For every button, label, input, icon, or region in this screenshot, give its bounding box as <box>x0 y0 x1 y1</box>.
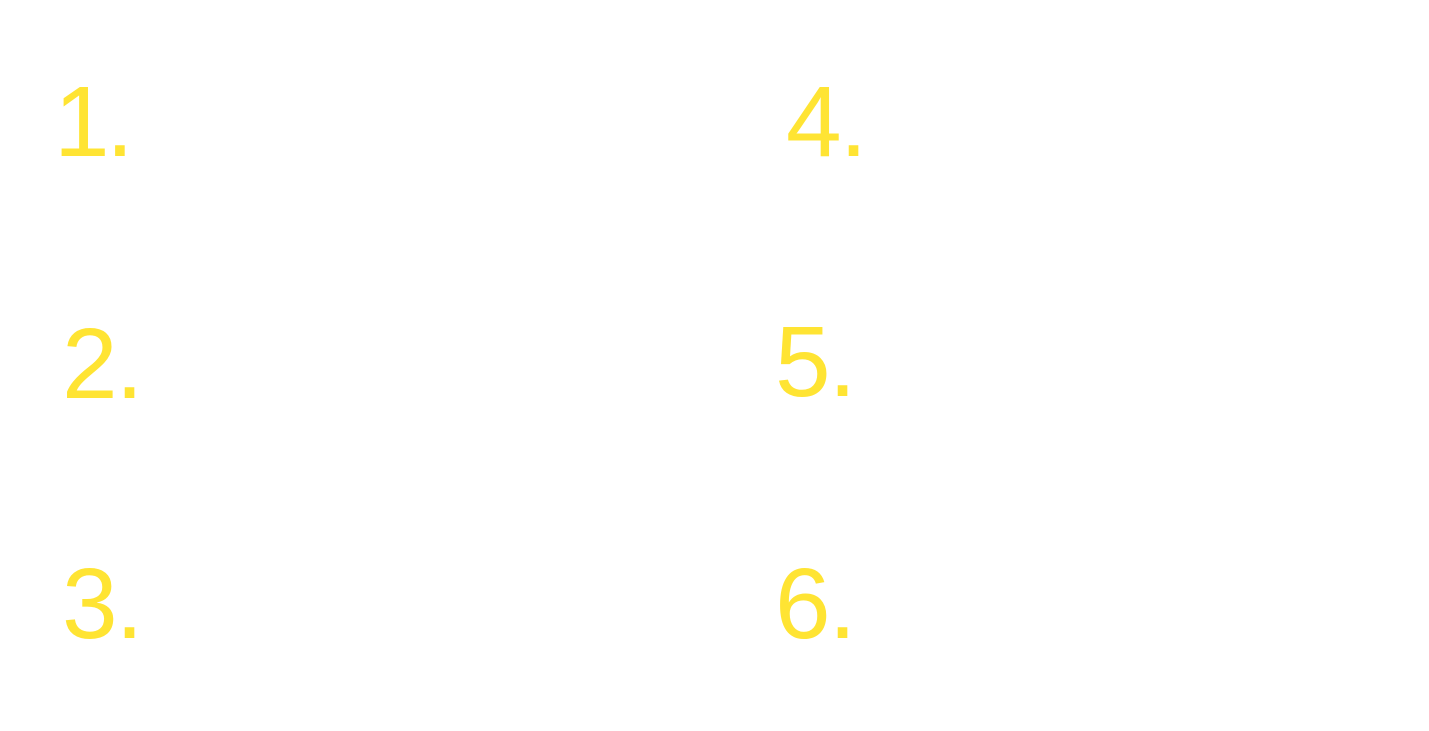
number 1 <box>54 66 132 178</box>
number 1: 1 <box>54 66 108 178</box>
number 4: 4. <box>786 66 865 178</box>
number 1: . <box>106 66 132 178</box>
number 2: 2. <box>62 308 141 420</box>
number 3: 3. <box>62 548 141 660</box>
number 5: 5. <box>775 306 854 418</box>
number 6: 6. <box>775 548 854 660</box>
